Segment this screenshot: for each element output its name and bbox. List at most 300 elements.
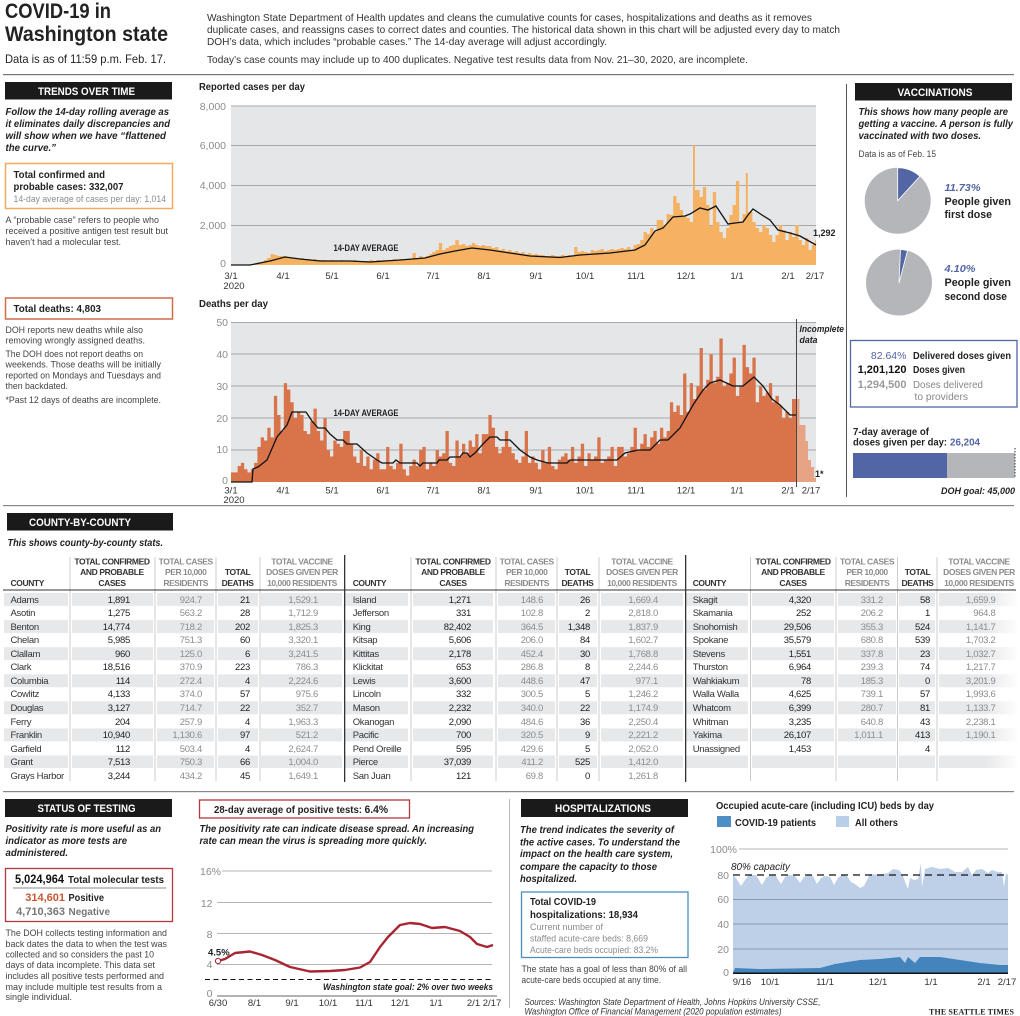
trends intro: Follow the 14-day rolling average as [6,106,169,118]
doses box: 1,201,120 [858,364,906,376]
intro text [207,12,840,66]
table 2 header: RESIDENTS [504,578,550,588]
table 2 rows: Klickitat [353,662,383,673]
table 3 rows: Walla Walla [693,689,740,700]
table 3 rows: 1,217.7 [966,662,996,673]
table 3 rows: 29,506 [784,622,811,633]
table 2 rows: 2,178 [449,649,471,660]
table 3 rows: Wahkiakum [693,676,740,687]
table 3 rows: Unassigned [693,744,740,755]
beds y axis: 80 [717,870,729,882]
table 1 rows: 10,940 [103,730,130,741]
second dose label: second dose [944,291,1007,303]
hospitalizations intro [520,824,680,885]
table 1 header: DEATHS [222,578,254,588]
incomplete deaths bars [796,399,816,482]
table 3 header: TOTAL VACCINE [948,556,1011,566]
testing note [6,928,167,1003]
table 1 header: COUNTY [10,578,45,588]
cases x axis: 6/1 [376,271,390,282]
table 2 rows: 595 [456,744,471,755]
testing note: days of data incomplete. This data set [6,960,155,971]
county intro: This shows county-by-county stats. [8,537,163,549]
data date: Data is as of 11:59 p.m. Feb. 17. [5,52,166,66]
table 2 rows: 2,250.4 [628,717,658,728]
doses box: 1,294,500 [858,379,906,391]
legend [717,816,898,829]
table 2 rows: 332 [456,689,471,700]
chart: occupied beds [710,844,1016,988]
table 2 rows: 1,271 [449,595,471,606]
table 1 rows: 434.2 [180,771,202,782]
beds y axis: 60 [717,894,729,906]
table 1 rows: 21 [240,595,250,606]
table 1 rows [10,595,318,782]
positivity intro: The positivity rate can indicate disease spread. An increasing [200,823,475,835]
probable case note: received a positive antigen test result but [6,226,168,237]
table 2 rows: 1,174.9 [628,703,658,714]
table 1 rows: 125.0 [180,649,202,660]
beds y axis: 0 [723,967,729,979]
beds y axis [710,844,737,979]
table 3 rows: 539 [915,635,930,646]
table 3 rows: 1,141.7 [966,622,996,633]
table 3 rows: Whatcom [693,703,731,714]
table 2 rows: 340.0 [521,703,543,714]
deaths x axis: 6/1 [376,486,390,496]
panel: county-by-county [3,513,1020,782]
table 3 rows: 3,235 [789,717,811,728]
table 1 header: TOTAL [225,567,251,577]
positivity x axis: 1/1 [429,998,443,1009]
cases x axis: 1/1 [730,271,744,282]
table 3 rows: 964.8 [973,608,996,619]
table 1 header: DOSES GIVEN PER [266,567,338,577]
table 2 header: 10,000 RESIDENTS [607,578,678,588]
callout: total cases: 14-day average of cases per day: 1,014 [14,194,166,205]
table 2 rows: 47 [580,676,590,687]
table 2 rows: 1,602.7 [628,635,658,646]
table 1 rows: 1,825.3 [288,622,318,633]
table 3 rows: 4 [925,744,930,755]
table 2 rows: 5,606 [449,635,471,646]
tests box: 4,710,363 [16,906,65,918]
table 2 rows [353,595,658,782]
80% capacity line [733,874,1008,876]
deaths x axis: 2020 [223,495,245,506]
panel: hospitalizations [520,799,1016,988]
cases y axis: 8,000 [200,101,226,113]
heading: trends [5,82,172,100]
title [5,0,168,46]
table 3 rows: 74 [920,662,930,673]
table 3 rows [693,595,996,755]
pie: first dose [865,168,931,234]
table 2 header: COUNTY [353,578,387,588]
table 3 rows: 3,201.9 [966,676,996,687]
callout: hospitalizations total: hospitalizations: 18,934 [530,909,638,921]
table 1 rows: 45 [240,771,250,782]
table 2 rows: 5 [585,744,590,755]
table 2 header: TOTAL VACCINE [611,556,674,566]
table 2 rows: Kitsap [353,635,377,646]
callout: hospitalizations total: Acute-care beds occupied: 83.2% [530,945,658,955]
table 1 rows: 14,774 [103,622,130,633]
deaths y axis: 20 [216,413,228,425]
table 2 rows: 22 [580,703,590,714]
table 1 header: TOTAL VACCINE [271,556,334,566]
table 1 rows: 112 [116,744,130,755]
positivity intro [200,823,475,847]
table 1 rows: 2,624.7 [288,744,318,755]
table 2 rows: Jefferson [353,608,389,619]
beds x axis [733,977,1016,988]
cases y axis: 4,000 [200,180,226,192]
positivity y axis: 8 [207,929,213,941]
table 1 rows: 374.0 [180,689,202,700]
table 1 rows: 503.4 [180,744,202,755]
table 3 rows: Thurston [693,662,728,673]
table 3 rows: 1,551 [789,649,811,660]
deaths x axis: 12/1 [677,486,695,496]
table 1 rows: 28 [240,608,250,619]
table 3 rows: Stevens [693,649,725,660]
table 3 rows: 4,625 [789,689,811,700]
all others area [733,863,1008,973]
table 2 rows: San Juan [353,771,390,782]
table 1 rows: Benton [10,622,39,633]
table 3 header: DEATHS [902,578,934,588]
table 1 rows: 204 [115,717,130,728]
table 1 rows: 1,649.1 [288,771,318,782]
hospitalizations intro: compare the capacity to those [520,861,657,873]
panel: vaccinations [850,83,1017,496]
heading: county-by-county [7,513,173,530]
table 2 rows: 1,348 [568,622,590,633]
chart: reported cases per day [199,81,836,292]
callout: hospitalizations total: Current number of [530,922,603,932]
table 1 rows: 223 [235,662,250,673]
table 1 rows: Franklin [10,730,42,741]
table 3 header: COUNTY [693,578,727,588]
second dose label: People given [944,277,1011,289]
table 1 rows: Chelan [10,635,39,646]
table 3 rows: 1,011.1 [854,730,883,741]
callout: 28-day average: 28-day average of positive tests: [214,805,362,816]
chart: positivity rate [200,866,501,1009]
cases x axis [223,271,824,292]
table 2 rows: Lewis [353,676,376,687]
table 1 header: 10,000 RESIDENTS [267,578,338,588]
table 1 rows: 22 [240,703,250,714]
7-day average label [853,427,980,448]
table 2 rows: 484.6 [521,717,543,728]
doses box: 82.64% [871,350,906,362]
sources [524,997,820,1016]
table 1 rows: 114 [116,676,130,687]
table 2 rows: 84 [580,635,590,646]
table 1 header: AND PROBABLE [80,567,145,577]
table 1 rows: 3,241.5 [288,649,318,660]
table 3 header: RESIDENTS [845,578,890,588]
goal label: Washington state goal: 2% over two weeks [323,982,493,993]
table 2 rows: 121 [456,771,471,782]
label: latest average: 1,292 [813,228,836,238]
tests box: 314,601 [25,892,65,904]
table 2 rows: 37,039 [444,757,471,768]
table 2 header: DOSES GIVEN PER [606,567,678,577]
positivity x axis: 10/1 [319,998,337,1009]
table 2 rows: 0 [585,771,590,782]
table 3 header: DOSES GIVEN PER [943,567,1015,577]
table 3 rows: 739.1 [861,689,883,700]
table 1 rows: 7,513 [108,757,130,768]
table 3 rows: 1 [925,608,930,619]
testing note: The DOH collects testing information and [6,928,167,939]
deaths y axis: 10 [216,444,228,456]
table 2 rows: 364.5 [521,622,543,633]
COVID-19 patients area [733,957,1008,973]
callout: 28-day average [200,800,410,818]
table 2 rows: 2,244.6 [628,662,658,673]
table 2 rows: 1,412.0 [628,757,658,768]
table 1 header: CASES [98,578,126,588]
table 1 rows: 3,127 [108,703,130,714]
deaths y axis [216,317,228,487]
deaths chart title: Deaths per day [199,298,268,310]
table 1 rows: 272.4 [180,676,202,687]
table: Skagit to Unassigned [693,556,1015,755]
positivity x axis [209,998,501,1009]
table 3 rows: 26,107 [784,730,811,741]
table 2 rows: 5 [585,689,590,700]
probable case note: haven’t had a molecular test. [6,237,121,248]
table 1 rows: Garfield [10,744,41,755]
table 1 rows: Columbia [10,676,49,687]
doses progress bar [853,448,1015,478]
positivity x axis: 12/1 [391,998,409,1009]
positivity x axis: 6/30 [209,998,227,1009]
vaccinations intro: vaccinated with two doses. [858,130,981,142]
capacity note: The state has a goal of less than 80% of all [522,964,687,975]
table 3 rows: 35,579 [784,635,811,646]
probable case note: A “probable case” refers to people who [6,215,159,226]
deaths x axis: 3/1 [224,486,238,496]
doses box: Delivered doses given [913,351,1011,362]
table 3 rows: Snohomish [693,622,738,633]
table 2 rows: 452.4 [521,649,543,660]
table 2 rows: 2,052.0 [628,744,658,755]
table 2 header: TOTAL CASES [500,556,555,566]
deaths note: removing wrongly assigned deaths. [6,336,145,346]
beds x axis: 12/1 [869,977,887,988]
deaths y axis: 50 [216,317,228,329]
table 1 header: TOTAL CASES [159,556,214,566]
tests box: Total molecular tests [68,874,164,886]
table 3 rows: 355.3 [861,622,883,633]
positivity y axis: 12 [201,898,213,910]
80% capacity label: 80% capacity [731,861,791,873]
beds x axis: 2/17 [998,977,1016,988]
testing intro: administered. [6,847,68,859]
heading: vaccinations: VACCINATIONS [898,87,972,99]
table 2 rows: 2,221.2 [628,730,658,741]
table 1 rows: 4 [245,744,250,755]
table 1 rows: 975.6 [296,689,318,700]
cases x axis: 2/1 [781,271,795,282]
cases y axis: 6,000 [200,140,226,152]
table 1 rows: 6 [245,649,250,660]
table 1 rows: Clark [10,662,32,673]
cases y axis: 2,000 [200,220,226,232]
table 3 rows: 1,190.1 [966,730,996,741]
table 3 header: 10,000 RESIDENTS [944,578,1015,588]
testing note: may include multiple test results from a [6,982,163,993]
intro text: Today’s case counts may include up to 400 duplicates. Negative test results data from Nov. 21–30, 2020, are incomplete. [207,54,748,66]
table 3 header: AND PROBABLE [761,567,826,577]
heading: status of testing: STATUS OF TESTING [38,803,136,815]
table 1 rows: 97 [240,730,250,741]
table 2 rows: 1,246.2 [628,689,658,700]
table 2 rows: 448.6 [521,676,543,687]
second dose label: 4.10% [943,263,976,275]
positivity y axis: 4 [207,959,213,971]
table 1 rows: 1,275 [108,608,130,619]
panel: status of testing [5,799,501,1009]
table 1 rows: 1,963.3 [288,717,318,728]
start marker [215,958,221,964]
table 1 rows: 4,133 [108,689,130,700]
capacity note [522,964,687,986]
table 1 header [10,556,338,588]
testing note: single individual. [6,992,72,1003]
table 1 rows: 4 [245,717,250,728]
table 2 rows: 1,261.8 [628,771,658,782]
data date note: Data is as of Feb. 15 [858,149,936,159]
deaths x axis [223,486,820,506]
table 3 rows: Skamania [693,608,734,619]
trends intro [6,106,171,154]
table 2 rows: 286.8 [521,662,543,673]
table 1 rows: 4 [245,676,250,687]
deaths y axis: 30 [216,381,228,393]
table 1 rows: 1,130.6 [172,730,202,741]
deaths note: weekends. Those deaths will be initially [5,360,161,370]
deaths 14-day average line [231,377,796,482]
positivity y axis: 16% [200,866,221,878]
incomplete data marker: Incomplete [800,324,844,334]
table 3 rows: 252 [796,608,811,619]
table 1 rows: 370.9 [180,662,202,673]
label: 14-day average: 14-DAY AVERAGE [334,243,398,253]
table 2 rows: 30 [580,649,590,660]
table 3 rows: 1,133.7 [966,703,996,714]
table 3 rows: Yakima [693,730,723,741]
panel: trends over time [5,82,173,406]
table 1 rows: 750.3 [180,757,202,768]
table 1 rows: 1,529.1 [288,595,318,606]
heading: county-by-county: COUNTY-BY-COUNTY [29,517,132,529]
cases y axis: 0 [220,258,226,270]
doses box [850,340,1017,407]
cases x axis: 8/1 [477,271,491,282]
table 2 rows: 8 [585,662,590,673]
table 1 rows: 18,516 [103,662,130,673]
cases x axis: 11/1 [627,271,645,282]
heading: status of testing [5,799,172,817]
incomplete data marker: data [800,335,818,345]
table 2 header: TOTAL CONFIRMED [415,556,491,566]
deaths bars [231,338,796,482]
table 2 rows: 411.2 [521,757,543,768]
table 3 rows: 6,964 [789,662,811,673]
positivity x axis: 9/1 [285,998,299,1009]
deaths note: then backdated. [6,381,68,392]
beds x axis: 11/1 [816,977,834,988]
table 2 rows: Pacific [353,730,379,741]
table 1 rows: Grant [10,757,33,768]
callout: hospitalizations total: Total COVID-19 [530,896,596,908]
table 1 rows: Ferry [10,717,32,728]
heading: hospitalizations [521,799,688,817]
deaths x axis: 5/1 [325,486,339,496]
table 1 rows: 1,712.9 [288,608,318,619]
deaths y axis: 0 [222,475,228,487]
chart title: occupied beds: Occupied acute-care (including ICU) beds by day [716,800,934,812]
table 3 rows: 43 [920,717,930,728]
table 3 rows: 1,032.7 [966,649,996,660]
table 2 rows: 331 [456,608,471,619]
deaths x axis: 9/1 [529,486,543,496]
table 3 rows: Whitman [693,717,728,728]
goal line [205,978,492,980]
positivity line [218,923,493,972]
cases x axis: 2/17 [806,271,824,282]
table 2 rows: 653 [456,662,471,673]
table 2 rows: 69.8 [526,771,543,782]
cases 14-day average line [231,206,816,265]
table 3 rows: 6,399 [789,703,811,714]
title: Washington state [5,23,168,46]
table 2 rows: 82,402 [444,622,471,633]
table 1 rows: 2,224.6 [288,676,318,687]
table 1 rows: 563.2 [180,608,202,619]
table 2 rows: Island [353,595,376,606]
testing intro: indicator as more tests are [6,835,127,847]
cases x axis: 5/1 [325,271,339,282]
7-day average label: doses given per day: [853,438,947,448]
deaths note [5,325,161,406]
chart: deaths per day [199,298,844,506]
legend: COVID-19 patients [735,818,816,829]
hospitalizations intro: impact on the health care system, [520,848,673,860]
legend: All others [855,818,898,829]
first dose label [944,182,1011,221]
table 2 rows: 2,232 [449,703,471,714]
hospitalizations intro: hospitalized. [520,873,577,885]
label: latest deaths: 1* [815,469,824,479]
positivity y axis [200,866,221,1000]
table 1 rows: 1,004.0 [288,757,318,768]
table 1 rows: 66 [240,757,250,768]
table 1 rows: 714.7 [180,703,202,714]
positivity x axis: 8/1 [248,998,261,1009]
positivity x axis: 2/17 [483,998,501,1009]
table 3 header: TOTAL CONFIRMED [755,556,831,566]
table 3 rows: 680.8 [861,635,883,646]
table 3 rows: 331.2 [861,595,883,606]
deaths x axis: 8/1 [477,486,491,496]
